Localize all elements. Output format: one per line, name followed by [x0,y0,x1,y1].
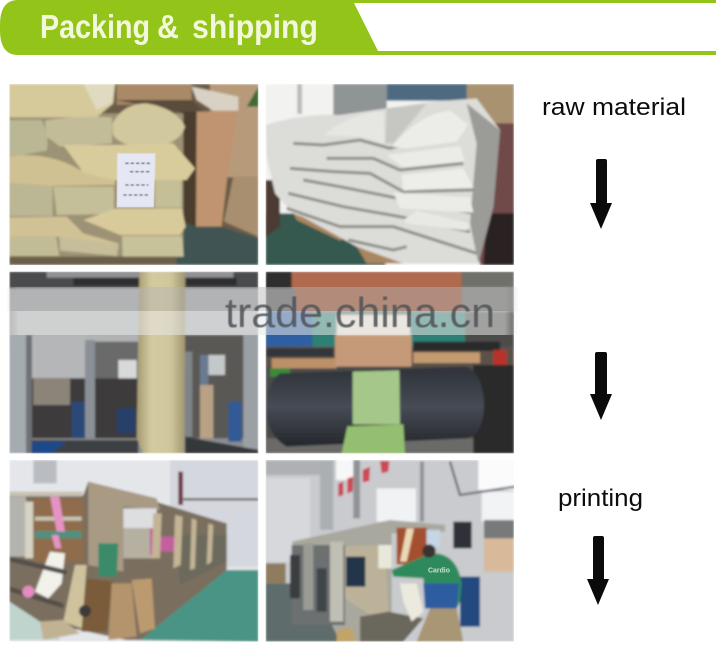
photo: printing machine with paper sacks [9,460,258,642]
arrow: raw material down [590,159,612,229]
title: Packing [40,8,150,45]
photo: worker at printing press [266,460,515,642]
arrow: printing down [587,536,609,605]
photo: stacked tan raw material sacks [9,84,258,265]
label: printing: printing [558,485,643,512]
header banner [0,0,716,55]
photo: film blowing machine with tall tube [9,272,258,453]
title [40,8,318,45]
title: shipping [192,8,318,45]
label: raw material: raw material [542,94,686,121]
arrow: film production down [590,352,612,420]
watermark text: trade.china.cn [225,289,495,336]
title: & [157,8,179,45]
photo: white raw material sacks on pallets [266,84,514,265]
label sheet on sacks [117,153,155,207]
photo: worker at printing press: Cardio [428,565,450,574]
photo: black and green film roll [266,272,514,453]
watermark band [6,287,520,336]
